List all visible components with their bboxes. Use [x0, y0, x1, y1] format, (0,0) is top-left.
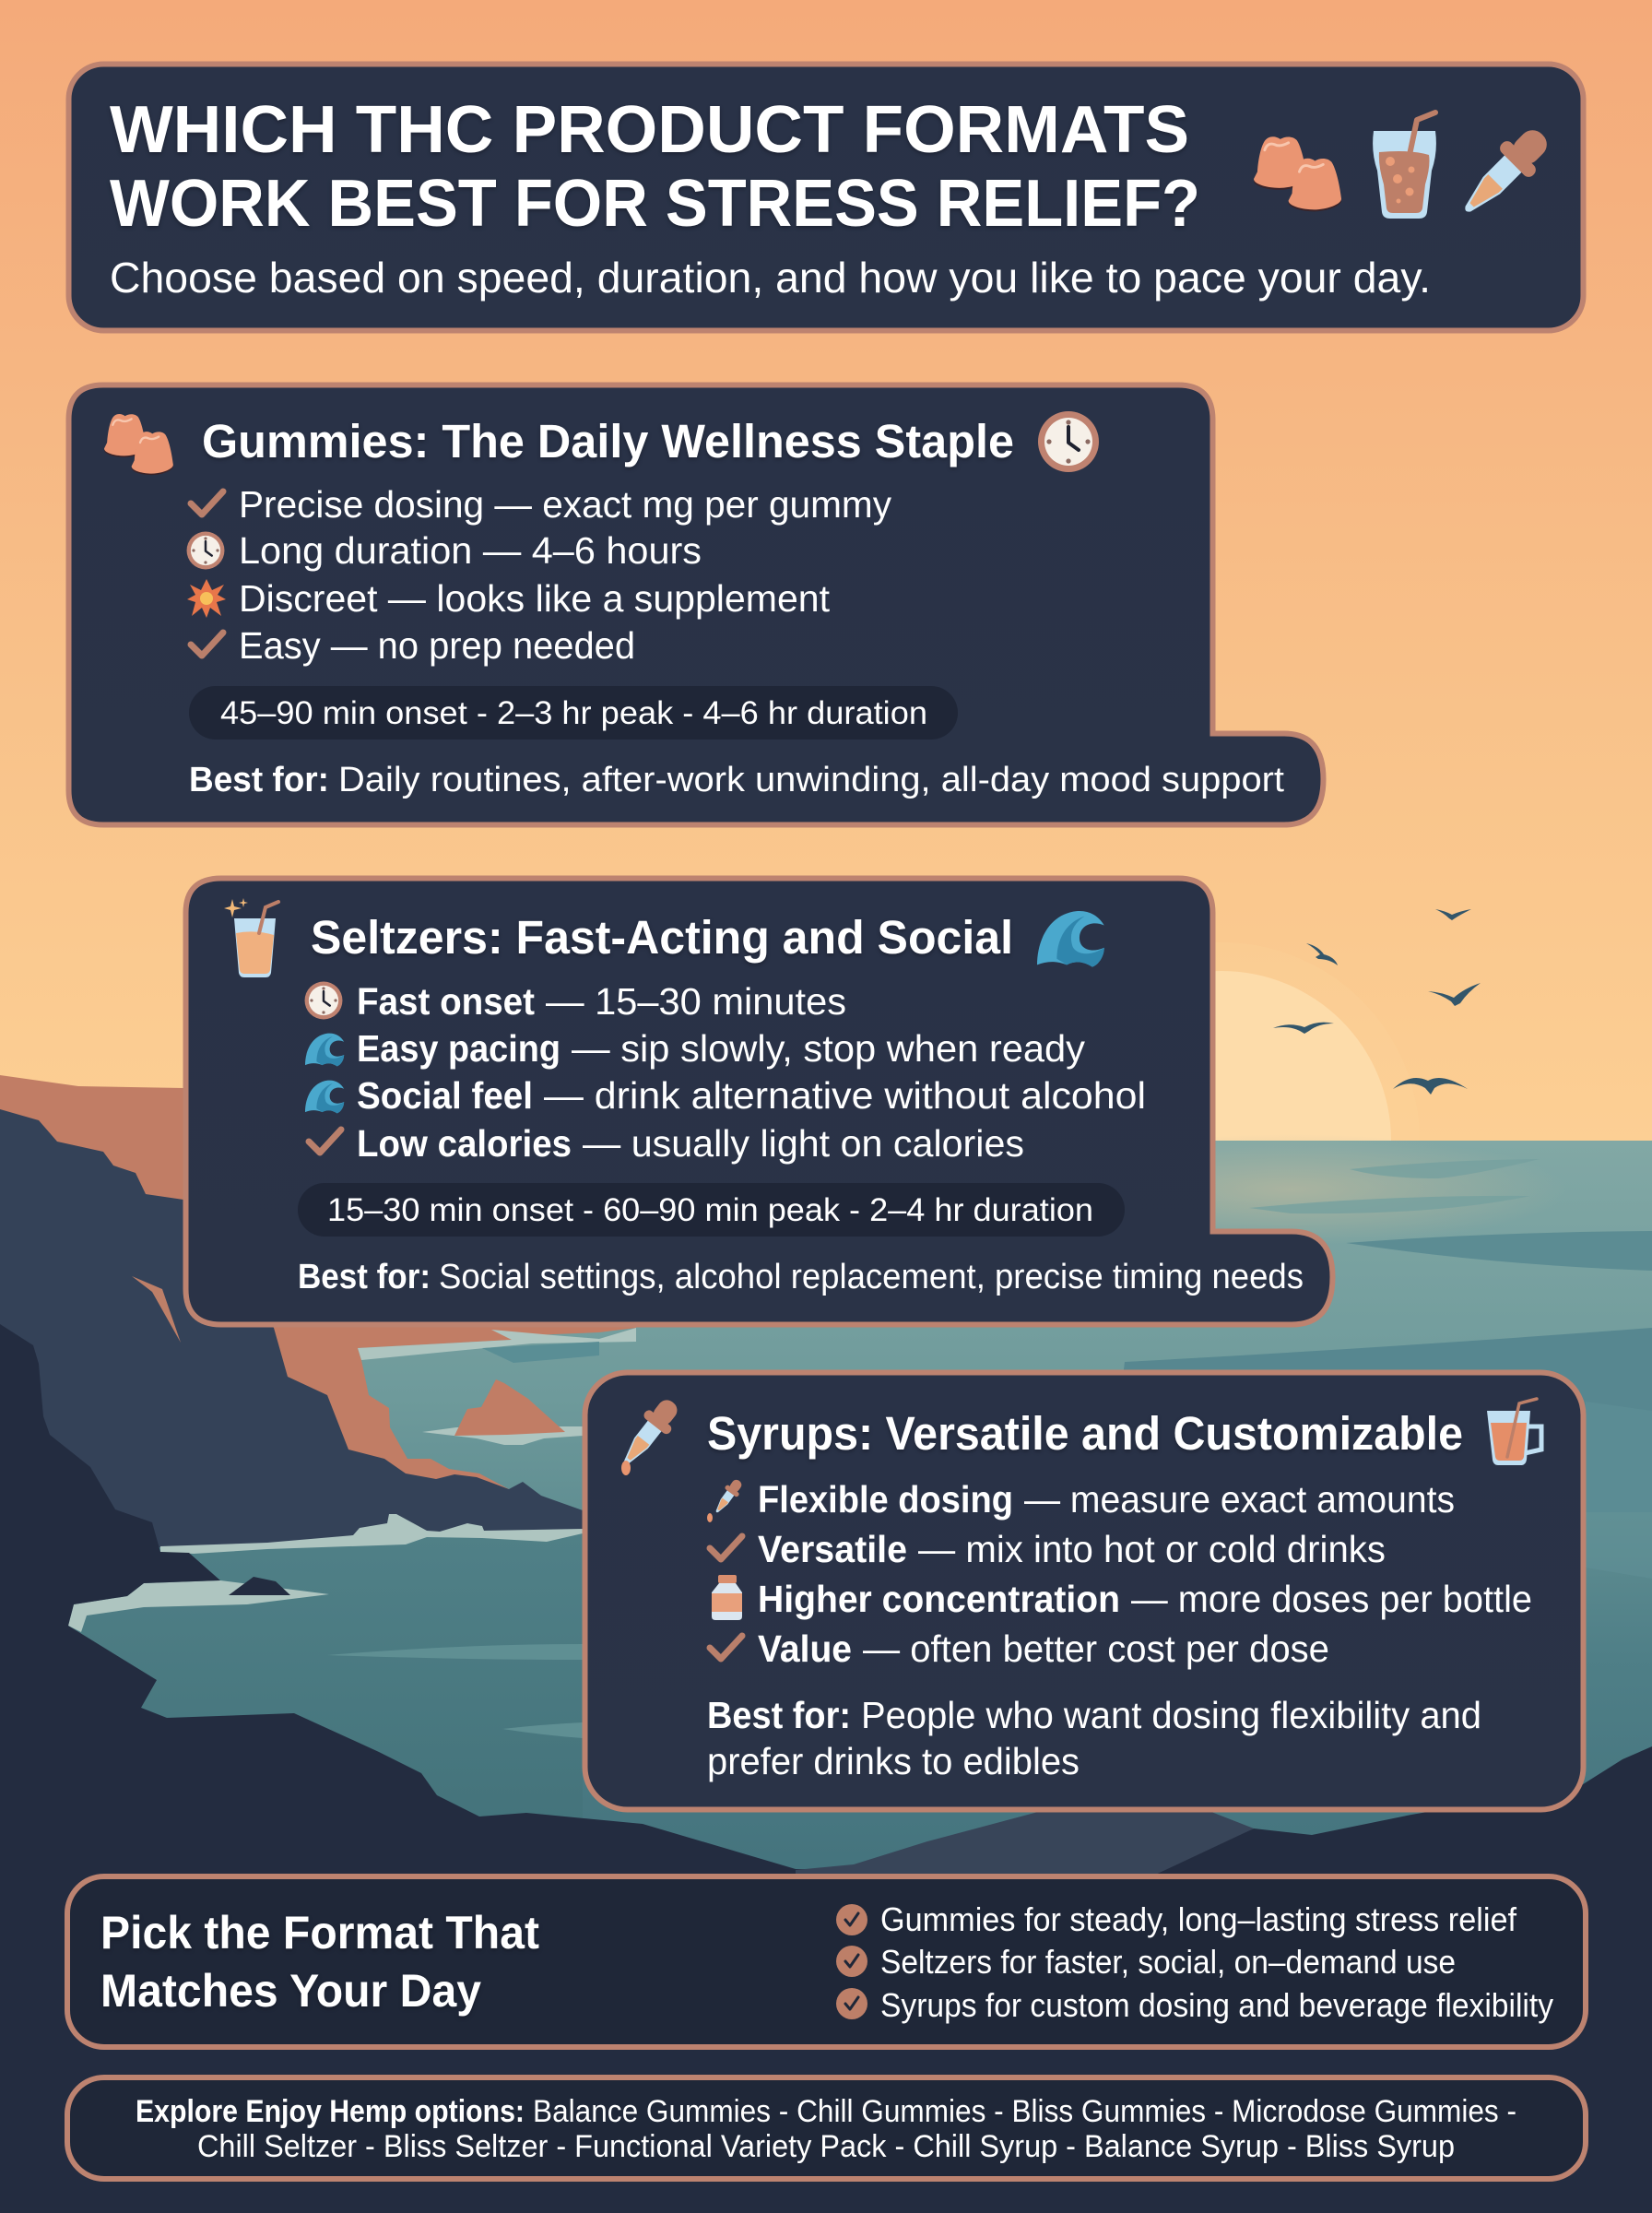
timing pill [298, 1183, 1125, 1237]
title heading: WHICH THC PRODUCT FORMATS [110, 93, 1189, 167]
panel: syrups [584, 1372, 1584, 1809]
bullet: fast onset [357, 980, 846, 1023]
foreground land [0, 1324, 1652, 2213]
timing pill: 15–30 min onset - 60–90 min peak - 2–4 hr duration [327, 1192, 1093, 1228]
terracotta cliff [0, 1075, 636, 1494]
bullet: precise dosing: Precise dosing — exact mg per gummy [239, 483, 891, 526]
icon: dropper [1450, 119, 1558, 227]
mid cliff [0, 1109, 583, 1586]
explore text: Chill Seltzer - Bliss Seltzer - Functional Variety Pack - Chill Syrup - Balance Syrup - Bliss Syrup [197, 2129, 1455, 2164]
bullet: versatile: — mix into hot or cold drinks [918, 1528, 1386, 1570]
bullet: higher concentration [758, 1578, 1532, 1620]
bullet: low calories: — usually light on calories [583, 1122, 1024, 1165]
summary heading: Matches Your Day [100, 1965, 481, 2017]
best for: syrups: People who want dosing flexibility and [861, 1694, 1481, 1736]
bullet: easy pacing: Easy pacing [357, 1027, 560, 1070]
icon: wave [305, 1081, 344, 1113]
title heading: WORK BEST FOR STRESS RELIEF? [110, 167, 1200, 241]
icon: burst [187, 579, 226, 618]
bullet: low calories: Low calories [357, 1122, 572, 1165]
icon: check badge [836, 1988, 867, 2019]
best for: gummies: Daily routines, after-work unwinding, all-day mood support [338, 761, 1284, 799]
panel: gummies [68, 385, 1324, 824]
icon: check badge [836, 1946, 867, 1977]
icon: check [710, 1636, 742, 1659]
summary heading: Pick the Format That [100, 1907, 539, 1959]
icon: drink glass [1373, 112, 1436, 219]
icon: check [309, 1130, 341, 1153]
bullet: flexible dosing: — measure exact amounts [1024, 1478, 1455, 1521]
title panel [68, 65, 1584, 330]
icon: check [191, 491, 223, 515]
bullet: fast onset: — 15–30 minutes [546, 980, 846, 1023]
heading: syrups: Syrups: Versatile and Customizable [707, 1407, 1463, 1460]
explore text: Explore Enjoy Hemp options: [136, 2094, 525, 2129]
panel: explore options [67, 2077, 1586, 2179]
bullet: fast onset: Fast onset [357, 980, 535, 1023]
bullet: social feel: — drink alternative without alcohol [544, 1074, 1146, 1117]
explore text: Balance Gummies - Chill Gummies - Bliss Gummies - Microdose Gummies - [533, 2094, 1516, 2129]
icon: wave [1037, 911, 1104, 967]
bullet: social feel: Social feel [357, 1074, 533, 1117]
icon: dropper with drop [613, 1392, 686, 1475]
bullet: flexible dosing: Flexible dosing [758, 1478, 1013, 1521]
icon: gummies [104, 414, 173, 475]
icon: gummies [1254, 136, 1341, 211]
takeaway: syrups: Syrups for custom dosing and beverage flexibility [880, 1986, 1553, 2024]
heading: seltzers: Seltzers: Fast-Acting and Social [311, 911, 1013, 964]
foam band [160, 1514, 583, 1554]
bullet: easy pacing [357, 1027, 1086, 1070]
best for: syrups: Best for: [707, 1694, 851, 1736]
shelf foam and small rock [68, 1580, 329, 1632]
icon: check badge [836, 1904, 867, 1935]
timing pill [189, 686, 958, 740]
timing pill: 45–90 min onset - 2–3 hr peak - 4–6 hr duration [220, 695, 927, 731]
bullet: versatile: Versatile [758, 1528, 907, 1570]
takeaway: seltzers: Seltzers for faster, social, on–demand use [880, 1943, 1456, 1981]
icon: small dropper [707, 1476, 746, 1522]
bullet: value: Value [758, 1627, 852, 1670]
icon: check [710, 1536, 742, 1559]
icon: clock [1038, 411, 1099, 472]
heading: gummies: Gummies: The Daily Wellness Staple [202, 415, 1014, 467]
best for: syrups [707, 1694, 1481, 1782]
icon: bottle [712, 1575, 742, 1620]
best for: syrups: prefer drinks to edibles [707, 1740, 1080, 1782]
bullet: easy pacing: — sip slowly, stop when ready [572, 1027, 1086, 1070]
bullet: higher concentration: Higher concentration [758, 1578, 1120, 1620]
icon: small clock [305, 982, 342, 1019]
best for: gummies: Best for: [189, 761, 329, 799]
icon: check [191, 633, 223, 656]
birds [1273, 909, 1481, 1095]
title heading [110, 93, 1200, 241]
bullet: low calories [357, 1122, 1024, 1165]
bullet: long duration: Long duration — 4–6 hours [239, 529, 702, 572]
best for: seltzers: Best for: [298, 1258, 431, 1296]
bullet: higher concentration: — more doses per bottle [1131, 1578, 1532, 1620]
panel: seltzers [186, 878, 1333, 1324]
rock island [422, 1426, 583, 1445]
takeaway: gummies: Gummies for steady, long–lasting stress relief [880, 1900, 1517, 1938]
best for: seltzers: Social settings, alcohol replacement, precise timing needs [439, 1258, 1304, 1296]
icon: wave [305, 1034, 344, 1066]
icon: small clock [187, 532, 224, 569]
panel: pick the format [67, 1876, 1586, 2047]
bullet: value: — often better cost per dose [863, 1627, 1329, 1670]
bullet: easy: Easy — no prep needed [239, 624, 635, 667]
summary heading [100, 1907, 539, 2017]
foam along the far shore [358, 1328, 636, 1360]
icon: seltzer glass [224, 898, 278, 977]
bullet: discreet: Discreet — looks like a supplement [239, 577, 831, 620]
bullet: flexible dosing [758, 1478, 1455, 1521]
lagoon water [0, 1531, 583, 1826]
subtitle: Choose based on speed, duration, and how you like to pace your day. [110, 254, 1431, 302]
explore text [136, 2094, 1516, 2164]
icon: mug [1487, 1399, 1541, 1465]
